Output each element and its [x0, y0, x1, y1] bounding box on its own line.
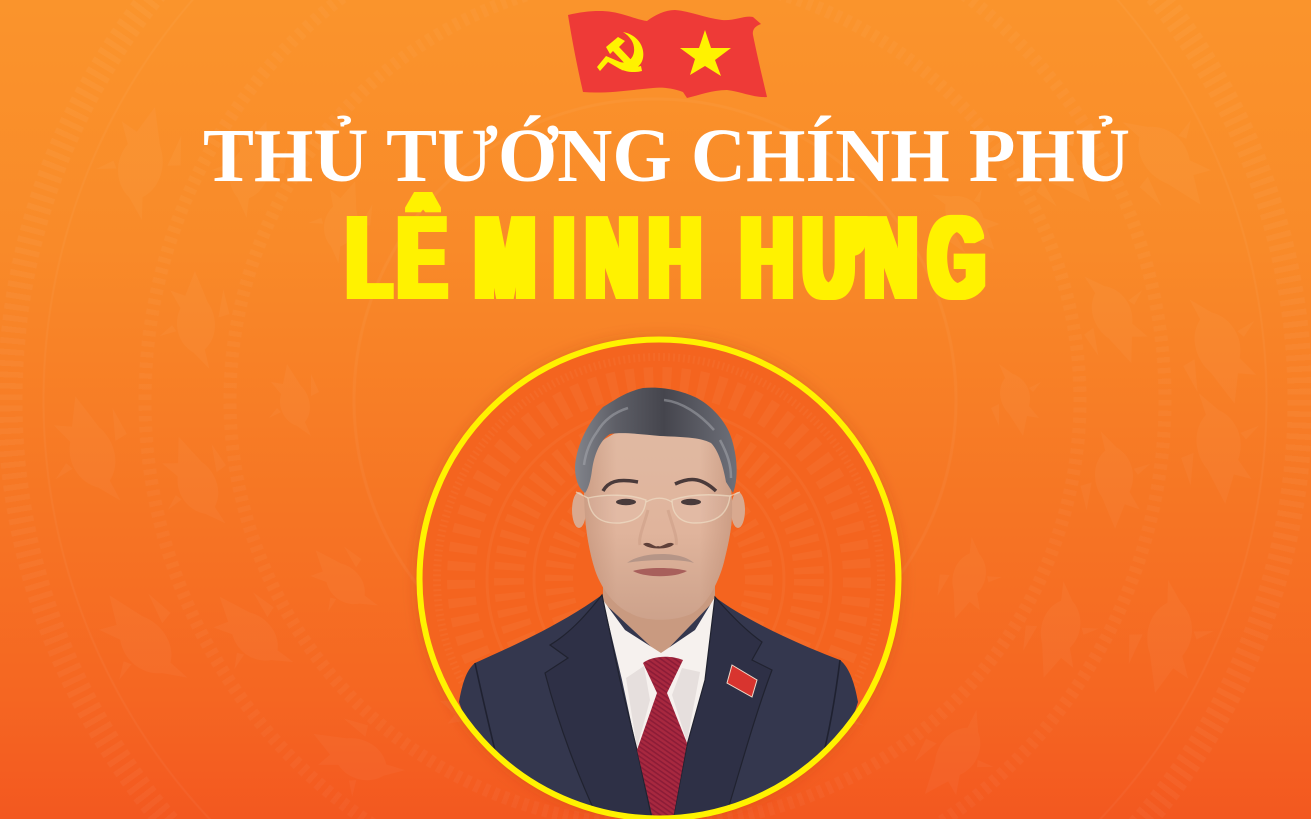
- neck: [603, 585, 715, 656]
- face: [584, 425, 732, 620]
- medallion drum motif: [437, 357, 881, 801]
- right eye: [681, 499, 701, 505]
- medallion gold ring: [420, 340, 898, 818]
- medallion disc: [421, 341, 897, 817]
- name: Le Minh Hung: LÊ MINH HƯNG: [347, 193, 985, 323]
- left eye: [616, 499, 636, 505]
- right eyebrow: [675, 480, 716, 491]
- portrait photo illustration: [459, 388, 858, 819]
- left lapel: [545, 595, 652, 819]
- nose shading: [640, 510, 676, 545]
- party and national flag: [568, 10, 767, 98]
- portrait medallion: [420, 340, 898, 819]
- hair: [575, 388, 737, 493]
- flag cloth: [568, 10, 767, 98]
- nose shadow: [643, 543, 674, 548]
- face side shading: [584, 438, 732, 588]
- lapel pin: [727, 665, 757, 697]
- right lapel: [673, 597, 772, 819]
- moustache: [627, 554, 694, 563]
- main drawing: [204, 10, 1128, 819]
- glasses: [576, 492, 740, 523]
- right ear: [731, 492, 745, 528]
- sleeve seams: [474, 660, 841, 750]
- left eyebrow: [603, 480, 638, 491]
- shirt collar: [604, 598, 714, 750]
- left ear: [572, 492, 586, 528]
- hair highlights: [584, 400, 731, 478]
- medallion shadow: [420, 340, 898, 818]
- title: prime minister: THỦ TƯỚNG CHÍNH PHỦ: [203, 114, 1130, 198]
- hammer and sickle: [597, 32, 643, 72]
- tie: [637, 657, 687, 819]
- shirt shadow: [626, 666, 700, 748]
- suit: [459, 595, 858, 819]
- mouth: [633, 568, 687, 576]
- yellow star: [680, 30, 731, 76]
